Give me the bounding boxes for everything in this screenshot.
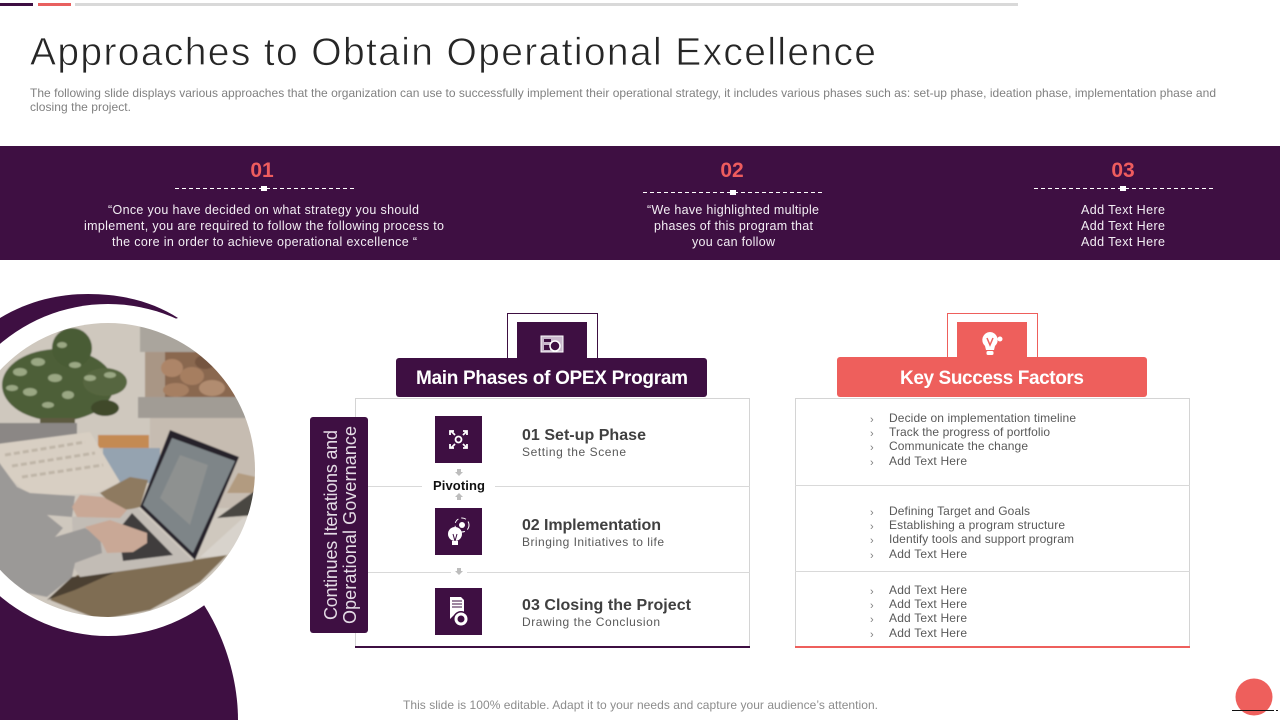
banner column 02: 02 bbox=[720, 159, 744, 182]
panel: main phases of OPEX program bbox=[310, 314, 750, 648]
pivoting label: Pivoting bbox=[433, 478, 485, 493]
sofa bbox=[0, 423, 256, 557]
phase 03: 03 Closing the Project bbox=[522, 597, 692, 614]
factor list 1 bbox=[870, 411, 1076, 469]
arrow: between phases 02 and 03 bbox=[451, 567, 467, 576]
banner column 02 bbox=[643, 159, 822, 249]
banner column 03: Add Text Here bbox=[1081, 219, 1165, 233]
table outline bbox=[355, 398, 750, 648]
banner column 03: 03 bbox=[1111, 159, 1135, 182]
factor list 1: › bbox=[870, 442, 874, 454]
factor list 1: › bbox=[870, 414, 874, 426]
factor list 1: › bbox=[870, 428, 874, 440]
arrow: down to pivoting bbox=[455, 469, 463, 476]
factor list 3: Add Text Here bbox=[889, 626, 967, 640]
hands bbox=[72, 495, 147, 553]
factor list 2: Establishing a program structure bbox=[889, 518, 1065, 532]
phase 01: Setting the Scene bbox=[522, 445, 626, 459]
header tab outline bbox=[948, 314, 1038, 358]
factor list 1: Add Text Here bbox=[889, 454, 967, 468]
header icon tab bbox=[517, 322, 587, 359]
phase 03 bbox=[435, 588, 692, 635]
knit cushion bbox=[0, 432, 120, 495]
description text: closing the project. bbox=[30, 100, 131, 114]
side label bbox=[310, 417, 368, 633]
banner column 03: Add Text Here bbox=[1081, 235, 1165, 249]
factor list 1: Decide on implementation timeline bbox=[889, 411, 1076, 425]
factor list 3: Add Text Here bbox=[889, 583, 967, 597]
header bar bbox=[837, 357, 1147, 397]
trousers bbox=[47, 555, 227, 620]
factor list 2: › bbox=[870, 535, 874, 547]
phase 02: Bringing Initiatives to life bbox=[522, 535, 664, 549]
table outline bbox=[795, 398, 1190, 648]
factor list 3: Add Text Here bbox=[889, 611, 967, 625]
factor list 1: Track the progress of portfolio bbox=[889, 425, 1050, 439]
header bar: Key Success Factors bbox=[900, 368, 1084, 389]
page marker circle bbox=[1232, 678, 1280, 716]
factor list 3 bbox=[870, 583, 967, 641]
factor list 2: Identify tools and support program bbox=[889, 532, 1074, 546]
header bar bbox=[396, 358, 707, 397]
banner column 02: phases of this program that bbox=[654, 219, 814, 233]
description text: The following slide displays various approaches that the organization can use to successfully implement their operational strategy, it includes various phases such as: set-up phase, ideation phase, implementation phase and bbox=[30, 86, 1216, 100]
factor list 2: Add Text Here bbox=[889, 547, 967, 561]
factor list 3: › bbox=[870, 629, 874, 641]
knee bbox=[100, 477, 148, 512]
side label: Continues Iterations and bbox=[321, 430, 341, 620]
panel: key success factors bbox=[795, 314, 1190, 648]
factor list 2: Defining Target and Goals bbox=[889, 504, 1030, 518]
factor list 2: › bbox=[870, 507, 874, 519]
phase 02 bbox=[435, 508, 664, 555]
decorative purple shapes behind photo bbox=[0, 294, 238, 720]
factor list 1: Communicate the change bbox=[889, 439, 1028, 453]
header icon tab bbox=[957, 322, 1027, 359]
plant bbox=[2, 328, 127, 430]
factor list 1: › bbox=[870, 457, 874, 469]
phase 01 bbox=[435, 416, 646, 463]
header tab outline bbox=[508, 314, 598, 358]
banner column 01 bbox=[84, 159, 444, 249]
title: Approaches to Obtain Operational Excellence bbox=[30, 31, 876, 74]
wall shelf with logs bbox=[138, 326, 248, 418]
panel: purple banner bbox=[0, 146, 1280, 260]
banner column 02: “We have highlighted multiple bbox=[647, 203, 819, 217]
banner column 01: “Once you have decided on what strategy you should bbox=[108, 203, 419, 217]
description text bbox=[30, 86, 1216, 114]
factor list 3: Add Text Here bbox=[889, 597, 967, 611]
footer note: This slide is 100% editable. Adapt it to your needs and capture your audience’s attention. bbox=[403, 698, 878, 712]
banner column 01: 01 bbox=[250, 159, 274, 182]
banner column 01: implement, you are required to follow the following process to bbox=[84, 219, 444, 233]
factor list 3: › bbox=[870, 600, 874, 612]
factor list 3: › bbox=[870, 614, 874, 626]
phase 03: Drawing the Conclusion bbox=[522, 615, 660, 629]
header bar: Main Phases of OPEX Program bbox=[416, 368, 688, 389]
side label: Operational Governance bbox=[340, 426, 360, 624]
photo: person working on laptop bbox=[0, 304, 274, 636]
factor list 3: › bbox=[870, 586, 874, 598]
phase 01: 01 Set-up Phase bbox=[522, 427, 646, 444]
factor list 2 bbox=[870, 504, 1074, 562]
banner column 02: you can follow bbox=[692, 235, 776, 249]
banner column 01: the core in order to achieve operational excellence “ bbox=[112, 235, 417, 249]
factor list 2: › bbox=[870, 521, 874, 533]
factor list 2: › bbox=[870, 550, 874, 562]
sweater bbox=[0, 450, 102, 597]
arrow: up from pivoting bbox=[455, 493, 463, 500]
laptop bbox=[72, 430, 239, 577]
banner column 03: Add Text Here bbox=[1081, 203, 1165, 217]
top accent bars bbox=[0, 3, 1018, 6]
phase 02: 02 Implementation bbox=[522, 517, 661, 534]
banner column 03 bbox=[1034, 159, 1213, 249]
